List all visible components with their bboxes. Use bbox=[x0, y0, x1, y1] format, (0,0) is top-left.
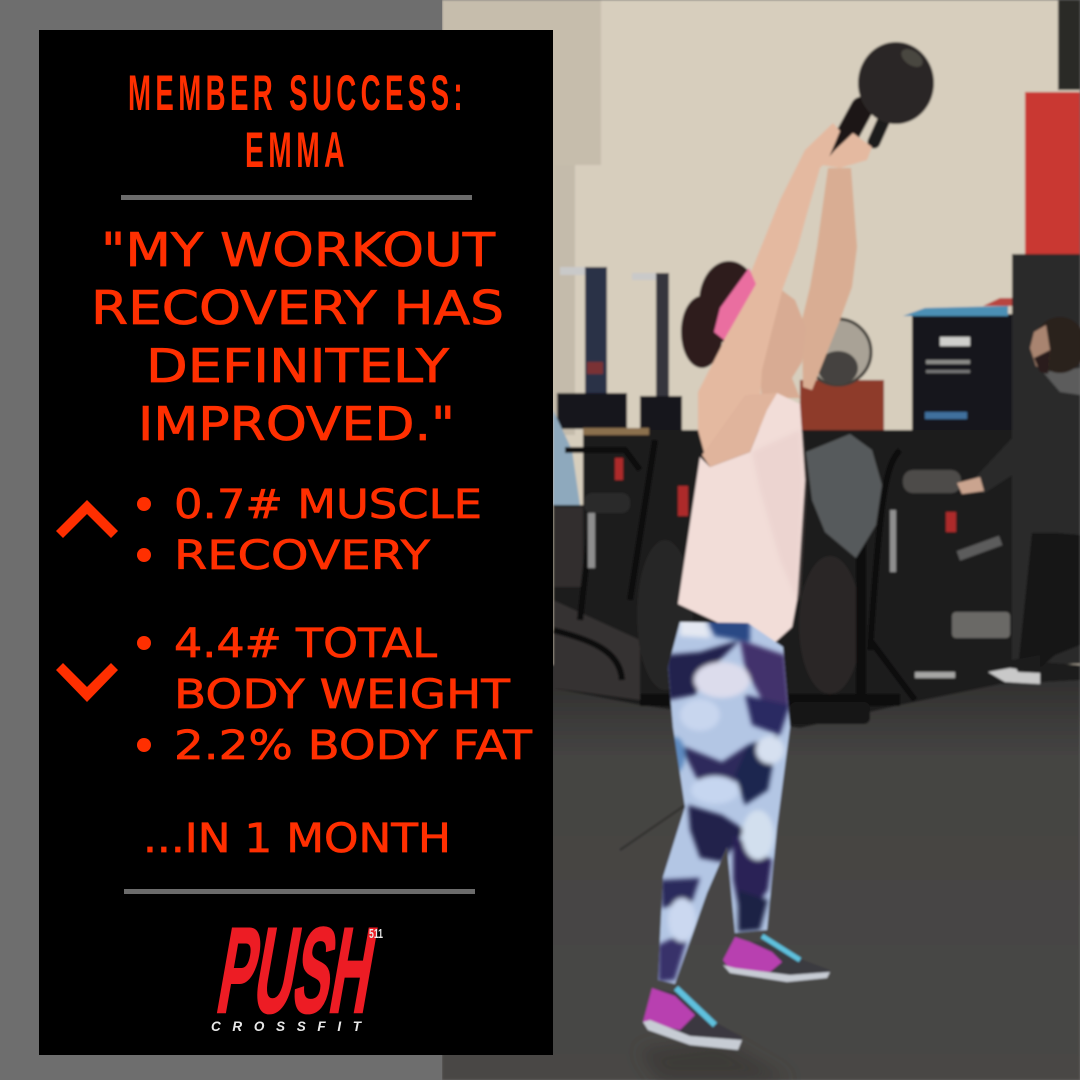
gains list bbox=[137, 482, 482, 579]
front arm and hand bbox=[698, 123, 840, 463]
gains list: RECOVERY bbox=[174, 533, 431, 579]
shelf unit bbox=[904, 296, 1014, 432]
lower left gray box bbox=[553, 507, 583, 587]
losses list: 4.4# TOTAL bbox=[174, 621, 438, 667]
quote: DEFINITELY bbox=[146, 339, 450, 393]
bike seats and silver posts bbox=[584, 470, 1002, 572]
top divider bbox=[121, 195, 472, 200]
woman bbox=[643, 42, 934, 1050]
text: PUSH bbox=[209, 903, 385, 1038]
title bbox=[128, 64, 467, 178]
rack two bbox=[632, 273, 682, 430]
headband bbox=[714, 268, 756, 340]
lower wall edge bbox=[555, 165, 575, 435]
draped gray jacket bbox=[806, 434, 882, 558]
legging print bbox=[658, 618, 790, 982]
bike frames bbox=[553, 440, 915, 700]
title: EMMA bbox=[245, 121, 349, 178]
right shoe bbox=[723, 936, 830, 982]
gains list: 0.7# MUSCLE bbox=[174, 482, 482, 528]
table top bbox=[583, 428, 649, 435]
hair and bun bbox=[681, 261, 759, 368]
vertical bike post bbox=[855, 546, 867, 694]
logo: PUSH 511 CrossFit: CROSSFIT bbox=[211, 1019, 363, 1034]
losses list: BODY WEIGHT bbox=[174, 672, 511, 718]
right hand fingers bbox=[822, 133, 872, 168]
floor bbox=[442, 665, 1080, 1080]
timeframe: ...IN 1 MONTH bbox=[143, 816, 451, 862]
dark pillar bbox=[1012, 254, 1080, 664]
dumbbells and floor gear bbox=[640, 612, 1010, 724]
wall column top left bbox=[442, 0, 601, 1080]
tank shading bbox=[752, 430, 804, 600]
logo: PUSH 511 CrossFit bbox=[209, 903, 385, 1038]
quote bbox=[91, 223, 504, 451]
icon: up chevron bbox=[56, 500, 118, 538]
top right corner box bbox=[1058, 0, 1080, 90]
gray background bbox=[0, 0, 442, 1080]
dark gym equipment mass bbox=[553, 430, 1080, 728]
losses list: 2.2% BODY FAT bbox=[174, 723, 533, 769]
red pillar padding bbox=[1025, 92, 1080, 254]
red markers on equipment bbox=[615, 458, 956, 532]
icon: down chevron bbox=[56, 663, 118, 702]
face and neck bbox=[760, 290, 804, 399]
logo: PUSH 511 CrossFit: 511 bbox=[369, 926, 383, 941]
tank top bbox=[678, 393, 805, 647]
leggings bbox=[658, 622, 790, 984]
black text panel bbox=[39, 30, 553, 1055]
quote: "MY WORKOUT bbox=[101, 223, 496, 277]
left shoe bbox=[643, 988, 742, 1050]
quote: RECOVERY HAS bbox=[91, 281, 504, 335]
floor seam bbox=[620, 806, 684, 850]
gym wall bbox=[564, 0, 1080, 667]
left blue cloth bbox=[553, 410, 580, 505]
kettlebell bbox=[838, 42, 934, 152]
fan wheel right bbox=[799, 556, 861, 694]
rack one bbox=[557, 267, 627, 429]
lower left floor shade bbox=[553, 600, 640, 700]
quote: IMPROVED." bbox=[138, 397, 455, 451]
underarm skin bbox=[702, 393, 777, 467]
photo: woman lifting kettlebell in gym bbox=[442, 0, 1080, 1080]
title: MEMBER SUCCESS: bbox=[128, 64, 467, 121]
losses list bbox=[137, 621, 533, 769]
fan wheel left bbox=[637, 540, 693, 690]
floor shadow bbox=[650, 1046, 778, 1080]
man in background bbox=[957, 317, 1080, 684]
bottom divider bbox=[124, 889, 475, 894]
fan and red equipment bbox=[800, 319, 884, 435]
back arm bbox=[802, 168, 857, 390]
